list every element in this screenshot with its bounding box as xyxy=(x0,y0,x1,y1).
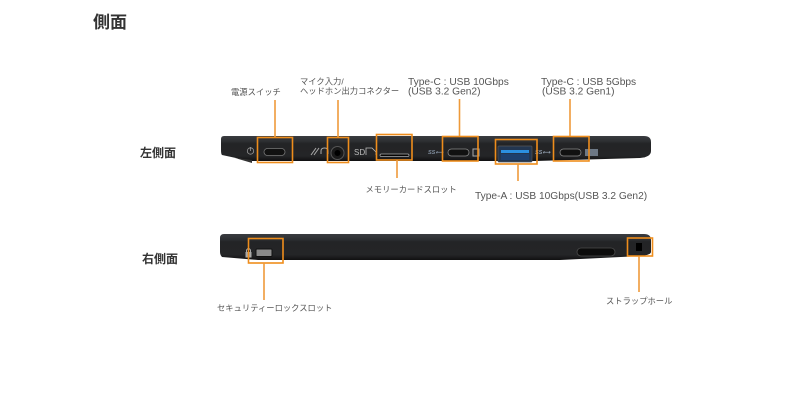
label: type-A: Type-A : USB 10Gbps(USB 3.2 Gen2) xyxy=(475,191,647,202)
type-C port 1 xyxy=(448,149,469,156)
heading: left side: 左側面 xyxy=(140,145,176,160)
label: power switch: 電源スイッチ xyxy=(231,87,281,97)
icon: microphone and headphone xyxy=(311,148,328,155)
stylus slot xyxy=(577,248,615,256)
USB-A port xyxy=(498,146,532,162)
label: memory card slot: メモリーカードスロット xyxy=(366,184,457,194)
type-C port 2 xyxy=(560,149,581,156)
icon: power symbol xyxy=(247,147,254,154)
audio jack xyxy=(331,146,344,160)
SS icon 2: SS⟷ xyxy=(535,150,551,156)
callout boxes xyxy=(248,134,652,263)
SD label: SD xyxy=(354,148,365,157)
heading: right side: 右側面 xyxy=(142,251,178,266)
icon: power delivery xyxy=(585,149,598,156)
icon: display port xyxy=(473,149,479,156)
strap hole xyxy=(636,243,642,251)
label: strap hole: ストラップホール xyxy=(606,296,672,306)
label: type-C 10Gbps: (USB 3.2 Gen2) xyxy=(408,86,480,98)
label: type-C 5Gbps: Type-C : USB 5Gbps xyxy=(541,77,636,88)
label: type-C 5Gbps: (USB 3.2 Gen1) xyxy=(542,86,614,98)
label: mic and headphone connector: マイク入力/ xyxy=(300,76,344,86)
SS icon 1: SS⟷ xyxy=(428,150,444,156)
right side device photo xyxy=(220,234,651,260)
power switch port xyxy=(264,148,285,156)
title: 側面 xyxy=(93,13,127,32)
memory card slot xyxy=(380,154,409,156)
icon: card xyxy=(366,148,376,155)
label: mic and headphone connector: ヘッドホン出力コネクター xyxy=(300,86,399,96)
label: type-C 10Gbps: Type-C : USB 10Gbps xyxy=(408,77,509,88)
security lock slot xyxy=(256,249,272,256)
label: security lock slot: セキュリティーロックスロット xyxy=(217,303,332,313)
left side device photo xyxy=(221,136,651,163)
leader lines xyxy=(264,99,639,300)
icon: lock xyxy=(246,248,252,258)
